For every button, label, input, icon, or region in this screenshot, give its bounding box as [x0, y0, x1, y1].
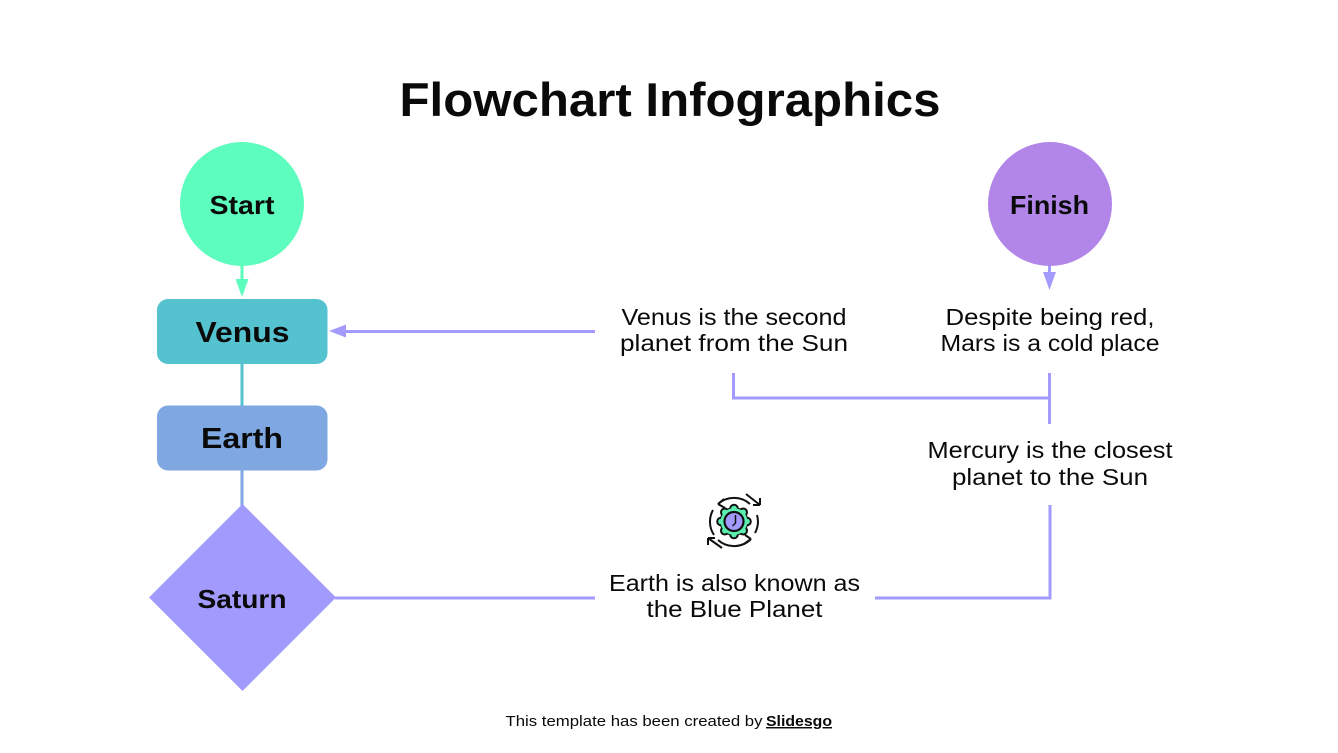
connector: text branches: [734, 373, 1050, 424]
text: venus: [620, 304, 848, 356]
text: mars: [940, 304, 1160, 356]
text: mercury: planet to the Sun: [952, 464, 1148, 490]
icon: gear with clock and cycle arrows: [708, 494, 760, 548]
text: mercury: Mercury is the closest: [928, 437, 1173, 463]
node: start: Start: [210, 190, 275, 220]
text: earth: [609, 570, 860, 622]
node: saturn: [149, 504, 336, 691]
node: start: [180, 142, 304, 266]
text: venus: planet from the Sun: [620, 330, 848, 356]
footer credit: [506, 714, 832, 730]
node: venus: Venus: [196, 317, 290, 349]
footer credit: This template has been created by: [506, 714, 763, 730]
connector: to saturn: [335, 596, 595, 600]
text: mars: Mars is a cold place: [940, 330, 1160, 356]
connector: mercury to earth text: [875, 505, 1050, 598]
arrow: finish down: [1043, 262, 1056, 290]
node: earth: Earth: [201, 423, 283, 455]
arrow: to venus: [329, 324, 595, 338]
footer credit: Slidesgo: [766, 714, 832, 730]
node: venus: [157, 299, 328, 364]
text: earth: the Blue Planet: [646, 596, 823, 622]
text: earth: Earth is also known as: [609, 570, 860, 596]
node: finish: [988, 142, 1112, 266]
node: finish: Finish: [1010, 190, 1089, 220]
text: mercury: [928, 437, 1173, 490]
text: mars: Despite being red,: [946, 304, 1154, 330]
arrow: start to venus: [236, 265, 248, 297]
node: saturn: Saturn: [198, 584, 286, 614]
title: Flowchart Infographics: [400, 73, 940, 126]
text: venus: Venus is the second: [622, 304, 846, 330]
node: earth: [157, 406, 328, 470]
connector: venus to earth: [240, 363, 244, 406]
connector: earth to saturn: [240, 470, 244, 506]
